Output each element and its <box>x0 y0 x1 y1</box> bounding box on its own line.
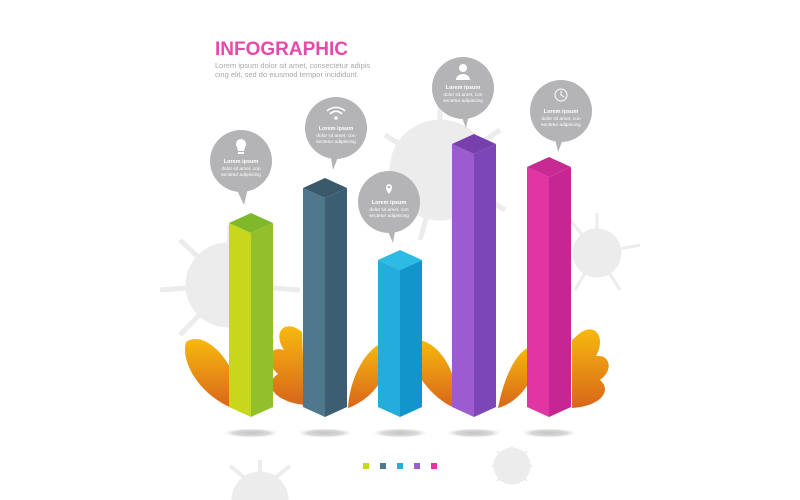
bubble 5: Lorem ipsum <box>544 109 578 115</box>
bubble 3: Lorem ipsum <box>372 200 406 206</box>
bubble 3 <box>358 171 420 243</box>
bubble 2 <box>305 97 367 170</box>
bubble 1: Lorem ipsum <box>224 159 258 165</box>
bubble 4: dolor sit amet, con <box>443 92 483 98</box>
bubble 5: sectetur adipiscing <box>541 122 581 128</box>
subtitle text: cing elit, sed do eiusmod tempor incididunt. <box>215 70 359 79</box>
bar 3 cyan <box>378 250 422 417</box>
bubble 4 <box>432 57 494 128</box>
background viruses <box>160 100 640 500</box>
bubble 3: dolor sit amet, con <box>369 207 409 213</box>
bubble 2: Lorem ipsum <box>319 126 353 132</box>
bubble 1 <box>210 130 272 205</box>
bubble 2: sectetur adipiscing <box>316 139 356 145</box>
title: INFOGRAPHIC <box>215 39 348 60</box>
bubble 5 <box>530 80 592 152</box>
bubble 1: sectetur adipiscing <box>221 172 261 178</box>
legend squares <box>363 463 437 469</box>
subtitle text: Lorem ipsum dolor sit amet, consectetur adipis <box>215 61 370 70</box>
leaves <box>185 326 609 408</box>
bubble 1: dolor sit amet, con <box>221 166 261 172</box>
bar 4 purple <box>452 134 496 417</box>
bubble 2: dolor sit amet, con <box>316 133 356 139</box>
bubble 5: dolor sit amet, con <box>541 116 581 122</box>
bubble 4: sectetur adipiscing <box>443 98 483 104</box>
shadows <box>221 428 579 438</box>
bar 5 pink <box>527 157 571 417</box>
bubble 3: sectetur adipiscing <box>369 213 409 219</box>
bar 1 green <box>229 213 273 417</box>
bar 2 slate <box>303 178 347 417</box>
bubble 4: Lorem ipsum <box>446 85 480 91</box>
